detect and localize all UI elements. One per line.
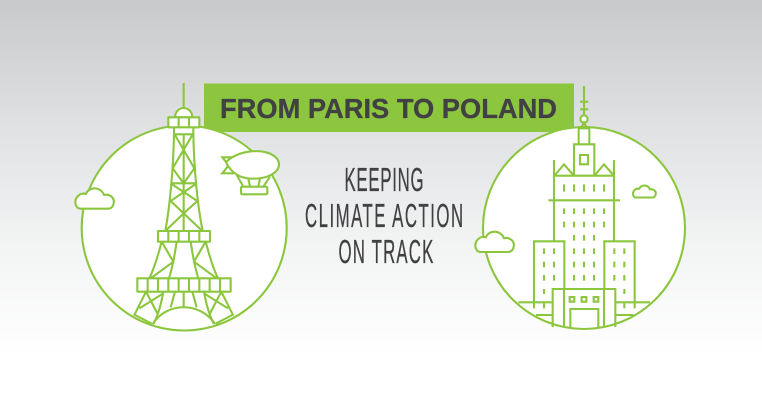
panel: Paris circle bbox=[75, 83, 287, 330]
icon: small cloud bbox=[633, 186, 656, 198]
panel: Warsaw circle bbox=[475, 86, 685, 329]
icon: airship bbox=[222, 151, 279, 194]
title banner bbox=[204, 84, 574, 132]
icon: Eiffel Tower bbox=[134, 83, 233, 324]
subtitle: CLIMATE ACTION bbox=[305, 197, 463, 235]
icon: cloud bbox=[75, 188, 114, 209]
subtitle: KEEPING bbox=[344, 161, 424, 199]
subtitle: ON TRACK bbox=[338, 233, 434, 271]
subtitle bbox=[305, 161, 463, 271]
icon: large cloud bbox=[475, 232, 514, 252]
title banner: FROM PARIS TO POLAND bbox=[220, 93, 557, 124]
icon: Palace of Culture bbox=[518, 86, 650, 328]
